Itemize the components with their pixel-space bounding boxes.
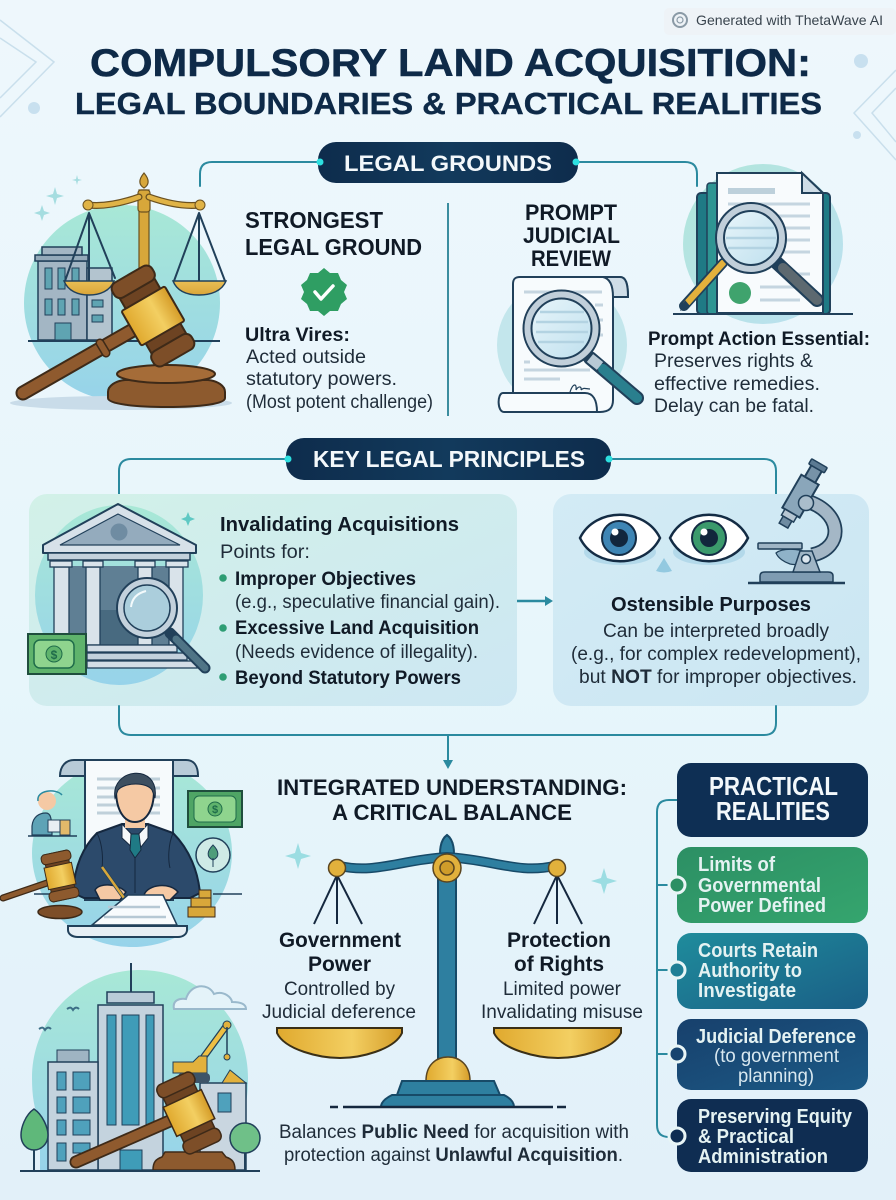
government power label: Judicial deference	[262, 1002, 416, 1023]
invalidating text: Points for:	[220, 542, 310, 563]
card: limits of governmental power	[669, 847, 868, 923]
card: courts retain authority: Courts Retain	[698, 940, 818, 962]
icon: scales and gavel	[10, 173, 232, 410]
card: courts retain authority	[669, 933, 868, 1009]
invalidating text: Improper Objectives	[235, 568, 416, 590]
ostensible text: (e.g., for complex redevelopment),	[571, 644, 861, 665]
ultra vires text: statutory powers.	[246, 369, 397, 390]
icon: eyes	[580, 515, 748, 572]
pill: legal grounds	[316, 142, 580, 183]
ultra vires text: Ultra Vires:	[245, 325, 350, 346]
arrow between panels	[517, 596, 553, 606]
panel: ostensible purposes	[553, 458, 869, 706]
watermark	[664, 8, 896, 35]
protection of rights label: Invalidating misuse	[481, 1002, 643, 1023]
protection of rights label: of Rights	[514, 953, 604, 976]
heading: integrated understanding: INTEGRATED UNDERSTANDING:	[277, 775, 627, 800]
icon: courthouse with magnifier	[28, 504, 205, 685]
pill: legal grounds: LEGAL GROUNDS	[344, 151, 552, 176]
government power label	[262, 929, 416, 1023]
ostensible text: Ostensible Purposes	[611, 593, 811, 616]
card: preserving equity: Preserving Equity	[698, 1106, 853, 1128]
connector: to integrated understanding	[119, 706, 776, 769]
icon: documents with magnifier and pencil	[673, 164, 853, 324]
prompt judicial review heading: PROMPT	[525, 200, 617, 225]
invalidating text	[219, 514, 500, 689]
prompt action text: Preserves rights &	[654, 351, 813, 372]
strongest legal ground text: STRONGEST	[245, 207, 384, 233]
icon: courthouse with magnifier: $	[51, 648, 58, 662]
ostensible text: Can be interpreted broadly	[603, 621, 829, 642]
icon: judge at desk: $	[212, 804, 218, 816]
card: judicial deference: Judicial Deference	[696, 1026, 856, 1048]
icon: judge at desk	[3, 759, 242, 947]
card: judicial deference	[669, 1019, 868, 1090]
icon: microscope	[748, 458, 845, 583]
prompt judicial review heading: REVIEW	[531, 246, 612, 271]
ostensible text	[571, 593, 861, 688]
prompt action text: Prompt Action Essential:	[648, 328, 870, 350]
prompt action text: effective remedies.	[654, 374, 820, 395]
strongest legal ground text	[245, 207, 422, 260]
card: courts retain authority: Authority to	[698, 960, 802, 982]
invalidating text: (e.g., speculative financial gain).	[235, 592, 500, 613]
card: judicial deference: (to government	[714, 1046, 840, 1067]
card: limits of governmental power: Limits of	[698, 854, 775, 876]
prompt judicial review heading	[523, 200, 620, 271]
icon: city with crane and gavel	[20, 963, 260, 1172]
prompt judicial review heading: JUDICIAL	[523, 223, 620, 248]
invalidating text: Beyond Statutory Powers	[235, 667, 461, 689]
card: limits of governmental power: Governmental	[698, 875, 821, 897]
card: preserving equity	[669, 1099, 868, 1172]
card: preserving equity: Administration	[698, 1146, 828, 1168]
ostensible text: but NOT for improper objectives.	[579, 667, 857, 688]
government power label: Government	[279, 929, 401, 952]
icon: scroll with magnifier	[497, 277, 637, 412]
prompt action text	[648, 328, 870, 417]
card: preserving equity: & Practical	[698, 1126, 794, 1148]
heading: integrated understanding: A CRITICAL BALANCE	[332, 800, 572, 825]
panel: practical realities header	[677, 763, 868, 837]
decorative chevrons and dots	[0, 20, 896, 160]
icon: green check badge	[301, 268, 347, 316]
protection of rights label	[481, 929, 643, 1023]
connector: practical realities	[657, 800, 677, 1137]
panel: invalidating acquisitions	[28, 494, 517, 706]
invalidating text: (Needs evidence of illegality).	[235, 642, 478, 663]
ultra vires text: (Most potent challenge)	[246, 392, 433, 413]
invalidating text: Excessive Land Acquisition	[235, 617, 479, 639]
pill: key legal principles	[284, 438, 612, 480]
government power label: Power	[308, 953, 371, 976]
balance scale	[277, 835, 621, 1107]
ultra vires text: Acted outside	[246, 347, 366, 368]
title: COMPULSORY LAND ACQUISITION:	[90, 42, 811, 85]
card: limits of governmental power: Power Defined	[698, 895, 826, 917]
title	[75, 42, 822, 121]
title: LEGAL BOUNDARIES & PRACTICAL REALITIES	[75, 87, 822, 121]
balance summary text: protection against Unlawful Acquisition.	[284, 1145, 623, 1166]
panel: practical realities header: PRACTICAL	[709, 771, 838, 801]
heading: integrated understanding	[277, 775, 627, 825]
card: judicial deference: planning)	[738, 1066, 814, 1087]
protection of rights label: Limited power	[503, 979, 622, 1000]
pill: key legal principles: KEY LEGAL PRINCIPLES	[313, 446, 585, 472]
strongest legal ground text: LEGAL GROUND	[245, 234, 422, 260]
ultra vires text	[245, 325, 433, 413]
prompt action text: Delay can be fatal.	[654, 396, 814, 417]
invalidating text: Invalidating Acquisitions	[220, 514, 459, 536]
sparkle	[181, 512, 195, 526]
balance summary text: Balances Public Need for acquisition with	[279, 1122, 629, 1143]
connector: key legal principles	[119, 459, 776, 494]
government power label: Controlled by	[284, 979, 395, 1000]
card: courts retain authority: Investigate	[698, 980, 796, 1002]
balance summary text	[279, 1122, 629, 1166]
panel: practical realities header: REALITIES	[716, 796, 830, 826]
watermark: Generated with ThetaWave AI	[696, 12, 883, 28]
connector: legal grounds	[200, 162, 697, 186]
protection of rights label: Protection	[507, 929, 611, 952]
